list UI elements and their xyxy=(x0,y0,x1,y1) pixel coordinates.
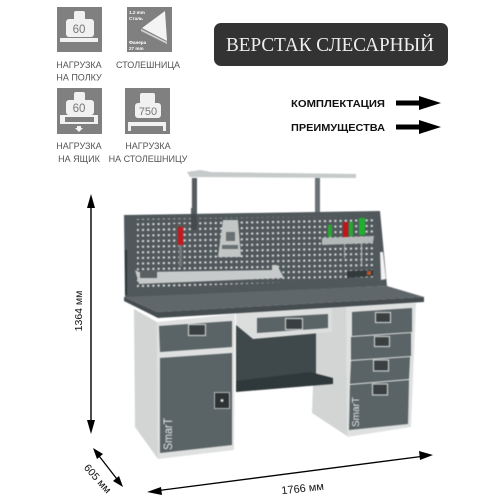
icon: tabletop: 1.2 mm xyxy=(129,10,145,15)
icon: tabletop: 27 mm xyxy=(129,46,144,51)
drawer 2 xyxy=(351,333,411,360)
workbench illustration xyxy=(124,170,424,459)
label: shelf load: НА ПОЛКУ xyxy=(56,72,102,82)
drawer 4 xyxy=(349,380,409,430)
right shelf with screwdrivers xyxy=(322,218,374,266)
door xyxy=(160,353,232,453)
drawer xyxy=(159,321,232,352)
width dimension arrow xyxy=(147,451,433,495)
title: ВЕРСТАК СЛЕСАРНЫЙ xyxy=(226,33,434,56)
socket block xyxy=(347,270,373,278)
left pedestal xyxy=(134,309,235,459)
link: advantages: ПРЕИМУЩЕСТВА xyxy=(291,123,385,134)
drawer 3 xyxy=(350,357,410,384)
top lamp shelf xyxy=(187,170,356,230)
height dimension arrow xyxy=(87,194,95,434)
icon: tabletop xyxy=(127,7,172,52)
tabletop xyxy=(124,286,424,318)
label: tabletop load: НАГРУЗКА xyxy=(125,141,171,151)
red tool xyxy=(172,224,190,266)
width label: 1766 мм xyxy=(281,481,325,497)
link: advantages xyxy=(291,120,441,134)
depth dimension arrow xyxy=(93,448,123,487)
handles xyxy=(372,312,390,395)
icon: tabletop: Сталь xyxy=(129,16,143,21)
link: equipment: КОМПЛЕКТАЦИЯ xyxy=(291,99,385,110)
depth label: 605 мм xyxy=(81,462,113,496)
perforated back panel xyxy=(124,211,387,298)
icon: drawer load 60: 60 xyxy=(73,103,85,115)
label: drawer load: НАГРУЗКА xyxy=(56,141,102,151)
drawer 1 xyxy=(352,308,412,336)
link: equipment xyxy=(291,96,441,110)
icon: shelf load 60 xyxy=(57,7,102,52)
icon: tabletop load 750: 750 xyxy=(139,106,157,118)
centre drawer xyxy=(236,307,332,339)
label: tabletop load: НА СТОЛЕШНИЦУ xyxy=(109,154,188,164)
icon: tabletop: Фанера xyxy=(129,40,146,45)
lower left shelf xyxy=(135,265,284,284)
brand: SmarT xyxy=(163,418,175,450)
label: drawer load: НА ЯЩИК xyxy=(58,154,101,164)
lock xyxy=(214,392,230,408)
icon: shelf load 60: 60 xyxy=(73,24,85,36)
centre tool holder xyxy=(218,220,241,257)
knee space back and shelf xyxy=(236,316,333,392)
title xyxy=(214,23,448,66)
label: shelf load: НАГРУЗКА xyxy=(56,60,102,70)
icon: tabletop load 750 xyxy=(125,88,170,134)
height label: 1364 мм xyxy=(73,291,85,331)
label: tabletop: СТОЛЕШНИЦА xyxy=(116,60,180,70)
posts in front of the panel xyxy=(191,214,197,230)
icon: drawer load 60 xyxy=(57,88,102,134)
brand: SmarT xyxy=(350,396,362,427)
right pedestal xyxy=(312,303,416,437)
